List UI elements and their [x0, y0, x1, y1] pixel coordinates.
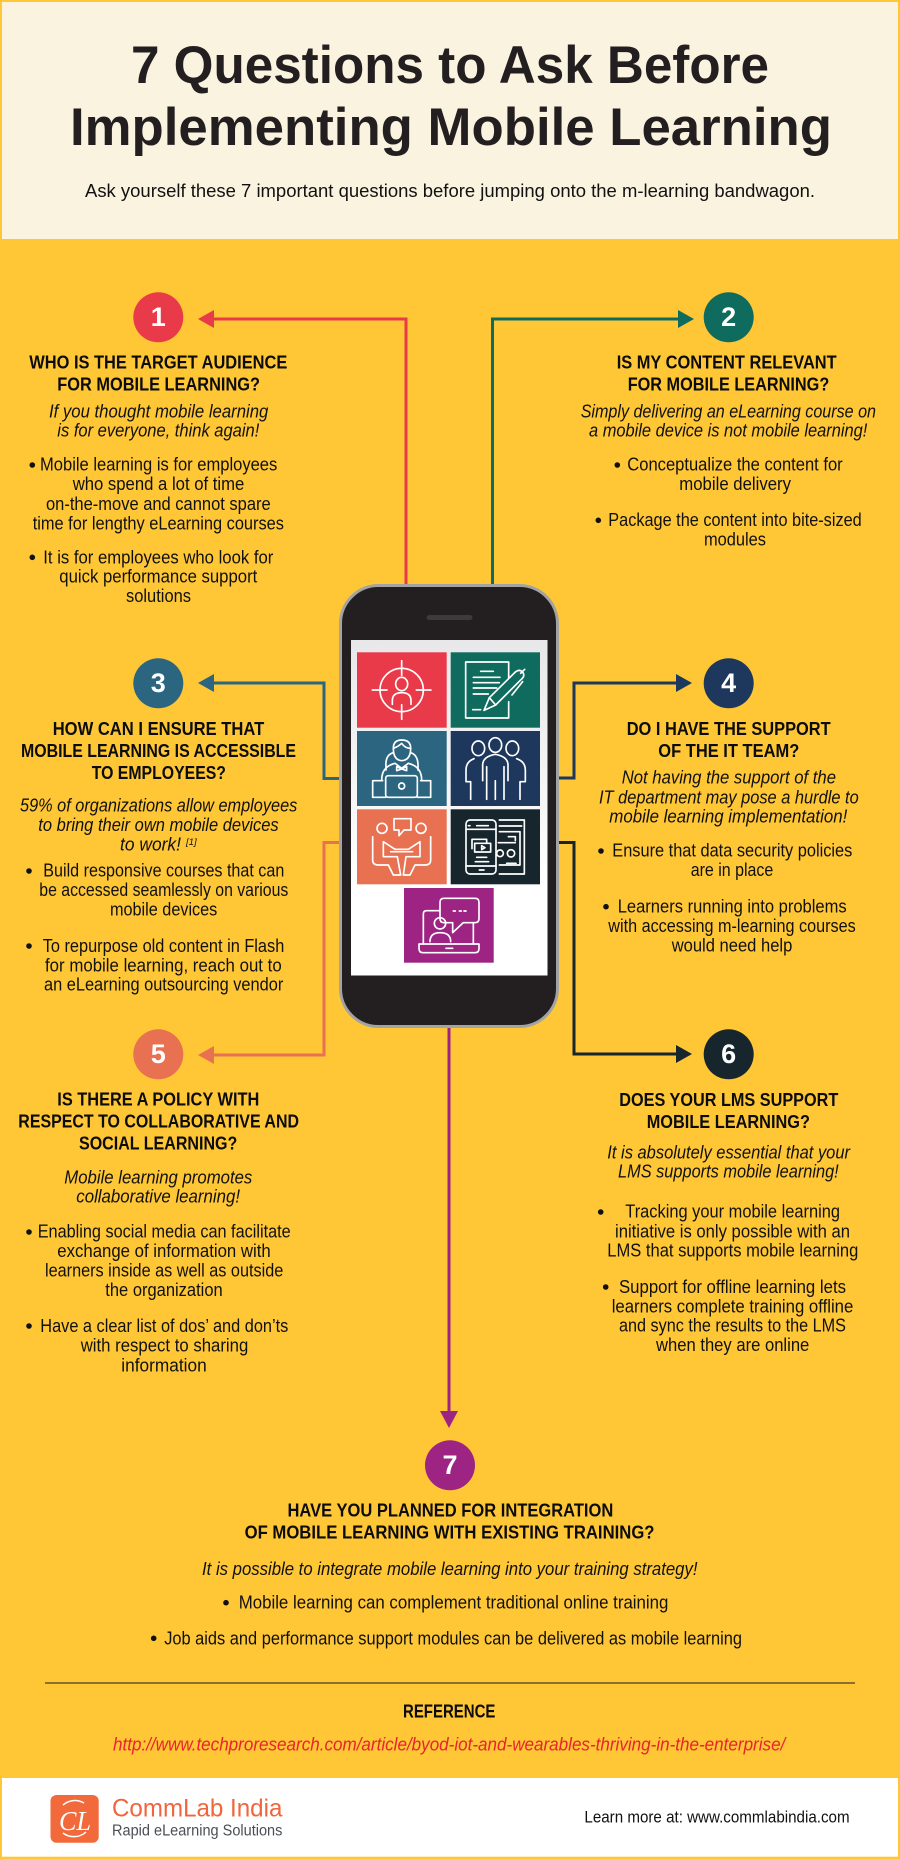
- bullets 6: Support for offline learning lets: [619, 1277, 846, 1297]
- bullets 6: [598, 1202, 858, 1355]
- bullets 6: Tracking your mobile learning: [625, 1202, 840, 1222]
- heading 6: MOBILE LEARNING?: [647, 1112, 810, 1132]
- heading 4: OF THE IT TEAM?: [658, 741, 799, 761]
- tile: integration: [404, 888, 494, 963]
- number badge 1: 1: [151, 302, 166, 332]
- bullets 5: the organization: [105, 1280, 223, 1300]
- bullets 1: [30, 455, 284, 606]
- bullets 1: time for lengthy eLearning courses: [33, 513, 284, 533]
- intro 1: is for everyone, think again!: [57, 421, 259, 441]
- heading 1: [29, 353, 287, 395]
- bullets 5: learners inside as well as outside: [45, 1261, 283, 1281]
- bullets 5: exchange of information with: [57, 1241, 271, 1261]
- bullets 5: Have a clear list of dos’ and don’ts: [40, 1316, 288, 1336]
- bullets 7: Mobile learning can complement traditional online training: [239, 1593, 668, 1613]
- intro 4: IT department may pose a hurdle to: [599, 787, 859, 807]
- bullets 3: [26, 861, 288, 995]
- bullets 3: an eLearning outsourcing vendor: [44, 975, 283, 995]
- intro 6: LMS supports mobile learning!: [618, 1162, 839, 1182]
- intro 4: mobile learning implementation!: [609, 807, 847, 827]
- bullets 6: initiative is only possible with an: [615, 1221, 850, 1241]
- tile: collaboration: [357, 809, 447, 884]
- arrow 5: [198, 842, 342, 1064]
- heading 5: SOCIAL LEARNING?: [79, 1134, 237, 1154]
- bullets 4: Ensure that data security policies: [612, 841, 852, 861]
- heading 3: [21, 719, 296, 783]
- heading 3: TO EMPLOYEES?: [92, 763, 226, 783]
- bullets 2: modules: [704, 529, 766, 549]
- number badge 2: [704, 292, 754, 342]
- number badge 2: 2: [721, 302, 736, 332]
- intro 3: to work!: [120, 835, 181, 855]
- bullets 3: be accessed seamlessly on various: [39, 880, 288, 900]
- arrow 6: [556, 842, 692, 1063]
- bullets 1: Mobile learning is for employees: [40, 455, 277, 475]
- header panel: [2, 2, 898, 239]
- number badge 7: 7: [442, 1450, 458, 1480]
- logo wordmark: CommLab India: [112, 1795, 282, 1823]
- intro 3: 59% of organizations allow employees: [20, 796, 297, 816]
- reference heading: REFERENCE: [403, 1702, 495, 1722]
- bullets 2: mobile delivery: [679, 474, 791, 494]
- phone: [340, 586, 558, 1026]
- arrow 1: [198, 310, 406, 586]
- bullets 6: LMS that supports mobile learning: [607, 1241, 858, 1261]
- learn more text: Learn more at: www.commlabindia.com: [584, 1808, 850, 1827]
- bullets 4: are in place: [691, 860, 773, 880]
- number badge 4: 4: [721, 668, 736, 698]
- bullets 3: Build responsive courses that can: [43, 861, 284, 881]
- bullets 7: Job aids and performance support modules can be delivered as mobile learning: [164, 1628, 742, 1648]
- question 3: [20, 658, 297, 995]
- arrow 2: [492, 310, 694, 586]
- question 5: [18, 1029, 299, 1375]
- title: [70, 36, 832, 157]
- bullets 3: for mobile learning, reach out to: [45, 955, 282, 975]
- arrow 7: [440, 1025, 458, 1428]
- logo icon: [50, 1795, 99, 1843]
- heading 1: WHO IS THE TARGET AUDIENCE: [29, 353, 287, 373]
- bullets 7: [151, 1593, 742, 1648]
- number badge 6: [704, 1029, 754, 1079]
- number badge 7: [425, 1440, 475, 1490]
- heading 2: IS MY CONTENT RELEVANT: [617, 353, 837, 373]
- arrow 3: [198, 674, 342, 778]
- tile: accessible: [357, 731, 447, 806]
- bullets 4: with accessing m-learning courses: [607, 916, 856, 936]
- heading 2: [617, 353, 837, 395]
- intro 4: Not having the support of the: [622, 768, 836, 788]
- question 6: [598, 1029, 858, 1355]
- question 1: [29, 292, 287, 606]
- footer panel: [2, 1778, 898, 1857]
- question 4: [598, 658, 859, 955]
- bullets 4: Learners running into problems: [618, 897, 847, 917]
- intro 5: [64, 1167, 252, 1207]
- intro 6: [607, 1142, 851, 1182]
- intro 6: It is absolutely essential that your: [607, 1142, 851, 1162]
- reference url: http://www.techproresearch.com/article/byod-iot-and-wearables-thriving-in-the-enterprise/: [113, 1735, 787, 1755]
- number badge 6: 6: [721, 1039, 736, 1069]
- bullets 2: Conceptualize the content for: [627, 455, 843, 475]
- tile: content: [451, 652, 540, 728]
- number badge 3: [133, 658, 183, 708]
- question 7: [151, 1440, 742, 1648]
- heading 7: HAVE YOU PLANNED FOR INTEGRATION: [288, 1501, 613, 1521]
- bullets 5: Enabling social media can facilitate: [38, 1222, 291, 1242]
- bullets 6: learners complete training offline: [612, 1296, 853, 1316]
- bullets 3: To repurpose old content in Flash: [43, 936, 284, 956]
- bullets 6: and sync the results to the LMS: [619, 1316, 846, 1336]
- bullets 5: [26, 1222, 291, 1375]
- bullets 1: quick performance support: [59, 567, 257, 587]
- intro 3: [20, 796, 297, 855]
- bullets 1: solutions: [126, 586, 191, 606]
- heading 5: IS THERE A POLICY WITH: [57, 1090, 259, 1110]
- intro 2: [581, 401, 876, 441]
- number badge 5: 5: [151, 1039, 166, 1069]
- intro 5: Mobile learning promotes: [64, 1167, 252, 1187]
- heading 7: OF MOBILE LEARNING WITH EXISTING TRAINING?: [245, 1523, 654, 1543]
- bullets 2: Package the content into bite-sized: [608, 510, 862, 530]
- bullets 1: who spend a lot of time: [72, 474, 244, 494]
- bullets 6: when they are online: [655, 1335, 809, 1355]
- intro 1: [49, 401, 268, 441]
- logo wordmark: Rapid eLearning Solutions: [112, 1823, 283, 1840]
- heading 3: HOW CAN I ENSURE THAT: [53, 719, 264, 739]
- bullets 3: mobile devices: [110, 900, 217, 920]
- number badge 4: [704, 658, 754, 708]
- bullets 4: [598, 841, 856, 955]
- number badge 1: [133, 292, 183, 342]
- intro 2: a mobile device is not mobile learning!: [589, 421, 867, 441]
- bullets 5: with respect to sharing: [80, 1336, 248, 1356]
- bullets 1: on-the-move and cannot spare: [46, 494, 271, 514]
- intro 3: [1]: [185, 837, 197, 847]
- intro 1: If you thought mobile learning: [49, 401, 268, 421]
- title: Implementing Mobile Learning: [70, 98, 832, 157]
- bullets 2: [596, 455, 862, 549]
- heading 5: [18, 1090, 299, 1154]
- logo wordmark: [112, 1795, 283, 1840]
- heading 4: [627, 719, 831, 761]
- heading 6: [619, 1090, 838, 1132]
- question 2: [581, 292, 876, 549]
- arrow 4: [556, 674, 692, 778]
- bullets 5: information: [121, 1355, 207, 1375]
- heading 6: DOES YOUR LMS SUPPORT: [619, 1090, 838, 1110]
- heading 1: FOR MOBILE LEARNING?: [57, 375, 260, 395]
- number badge 3: 3: [151, 668, 166, 698]
- bullets 4: would need help: [671, 935, 792, 955]
- tile: target audience: [357, 652, 447, 728]
- title: 7 Questions to Ask Before: [131, 36, 769, 95]
- number badge 5: [133, 1029, 183, 1079]
- logo icon: CL: [59, 1806, 91, 1836]
- heading 7: [245, 1501, 654, 1543]
- heading 5: RESPECT TO COLLABORATIVE AND: [18, 1112, 299, 1132]
- intro 4: [599, 768, 859, 827]
- bullets 1: It is for employees who look for: [43, 547, 273, 567]
- heading 4: DO I HAVE THE SUPPORT: [627, 719, 831, 739]
- tile: LMS: [451, 809, 540, 884]
- heading 3: MOBILE LEARNING IS ACCESSIBLE: [21, 741, 296, 761]
- tile: team: [451, 731, 540, 806]
- heading 2: FOR MOBILE LEARNING?: [628, 375, 829, 395]
- intro 3: to bring their own mobile devices: [38, 815, 279, 835]
- subtitle: Ask yourself these 7 important questions before jumping onto the m-learning bandwagon.: [85, 180, 815, 201]
- intro 7: It is possible to integrate mobile learning into your training strategy!: [202, 1559, 698, 1579]
- intro 5: collaborative learning!: [76, 1187, 240, 1207]
